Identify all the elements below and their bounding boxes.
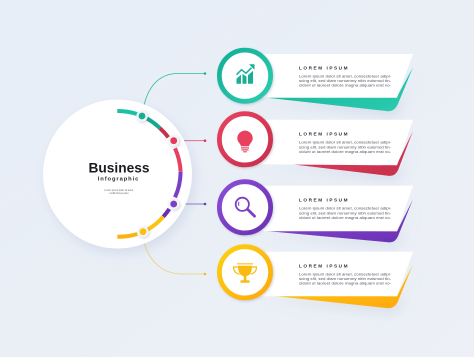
card text: Lorem ipsum dolor sit amet, consectetuer adipi- xyxy=(299,273,392,277)
icon: bar chart xyxy=(236,64,254,84)
card text: scing elit, sed diam nonummy nibh euismod tin- xyxy=(299,277,392,281)
card text: Lorem ipsum dolor sit amet, consectetuer adipi- xyxy=(299,207,392,211)
card text: cidunt ut laoreet dolore magna aliquam erat vo- xyxy=(299,282,392,286)
panel: step 4 yellow xyxy=(219,247,413,308)
icon: trophy xyxy=(234,263,256,283)
card text xyxy=(299,273,392,286)
icon: light bulb xyxy=(237,131,253,152)
card text: cidunt ut laoreet dolore magna aliquam erat vo- xyxy=(299,216,392,220)
card text: cidunt ut laoreet dolore magna aliquam erat vo- xyxy=(299,84,392,88)
card text xyxy=(299,207,392,220)
node: purple xyxy=(168,198,179,210)
central circle panel xyxy=(43,100,192,248)
node: red xyxy=(168,135,179,146)
central caption: Lorem ipsum dolor sit amet, xyxy=(104,189,134,192)
central circle panel: mollis fames justo xyxy=(110,192,129,195)
card heading: LOREM IPSUM xyxy=(299,66,348,71)
subheading: Infographic: Infographic xyxy=(98,176,139,182)
card text: cidunt ut laoreet dolore magna aliquam erat vo- xyxy=(299,150,392,154)
card text xyxy=(299,74,392,88)
card text: scing elit, sed diam nonummy nibh euismod tin- xyxy=(299,211,392,215)
card text: scing elit, sed diam nonummy nibh euismod tin- xyxy=(299,79,392,83)
node: yellow xyxy=(137,226,149,237)
connector lines xyxy=(143,72,206,275)
card text: Lorem ipsum dolor sit amet, consectetuer adipi- xyxy=(299,141,392,145)
card heading: LOREM IPSUM xyxy=(299,197,348,202)
segmented arc xyxy=(117,111,181,237)
panel: step 2 red xyxy=(219,114,413,176)
panel: step 1 teal xyxy=(219,50,413,111)
node: teal xyxy=(136,110,148,122)
card heading: LOREM IPSUM xyxy=(299,132,348,137)
card text: scing elit, sed diam nonummy nibh euismod tin- xyxy=(299,145,392,149)
panel: step 3 purple xyxy=(219,182,413,242)
card text xyxy=(299,141,392,154)
card text: Lorem ipsum dolor sit amet, consectetuer adipi- xyxy=(299,74,392,78)
card heading: LOREM IPSUM xyxy=(299,263,348,268)
icon: magnifying glass xyxy=(236,198,254,216)
heading: Business: Business xyxy=(88,160,150,176)
